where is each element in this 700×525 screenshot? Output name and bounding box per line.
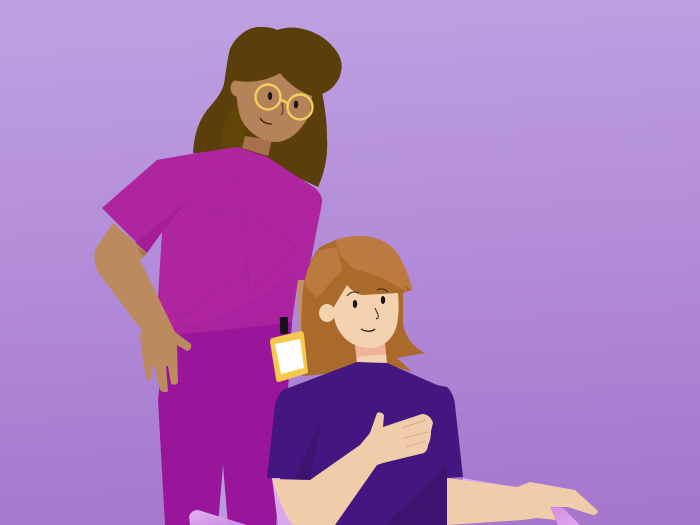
patient right arm and hand — [447, 478, 598, 525]
patient neck — [355, 342, 387, 364]
nurse figure — [94, 27, 342, 525]
nurse back hair — [193, 27, 342, 187]
gap between legs — [218, 465, 228, 525]
nurse glasses — [256, 84, 312, 120]
patient neck light — [357, 354, 387, 364]
patient shirt — [267, 362, 463, 525]
right chair handle — [550, 507, 580, 525]
nurse far arm — [297, 280, 306, 365]
patient figure — [267, 236, 598, 525]
patient ear — [319, 304, 335, 322]
patient back hair — [301, 236, 425, 376]
nurse facial features — [260, 92, 298, 124]
nurse inner hair shade — [221, 102, 246, 150]
arm shadow — [137, 247, 147, 257]
patient left arm and hand — [272, 412, 433, 525]
shirt shadows — [295, 417, 447, 525]
nurse pants — [158, 322, 292, 525]
scrub shadow and fold lines — [135, 165, 298, 335]
nurse face — [235, 73, 312, 142]
right arm lilac strip — [460, 478, 515, 490]
patient hair lobes — [305, 236, 412, 298]
nurse arm and hand — [94, 223, 191, 392]
nurse front hair — [230, 27, 342, 94]
badge — [270, 331, 308, 382]
chair handle left — [189, 510, 247, 525]
nurse neck — [242, 136, 272, 156]
nurse ear — [230, 79, 248, 97]
nurse scrub top — [102, 147, 322, 335]
patient face — [332, 285, 399, 348]
patient facial features — [347, 289, 388, 331]
chair back — [272, 478, 296, 525]
badge strap — [280, 317, 288, 334]
